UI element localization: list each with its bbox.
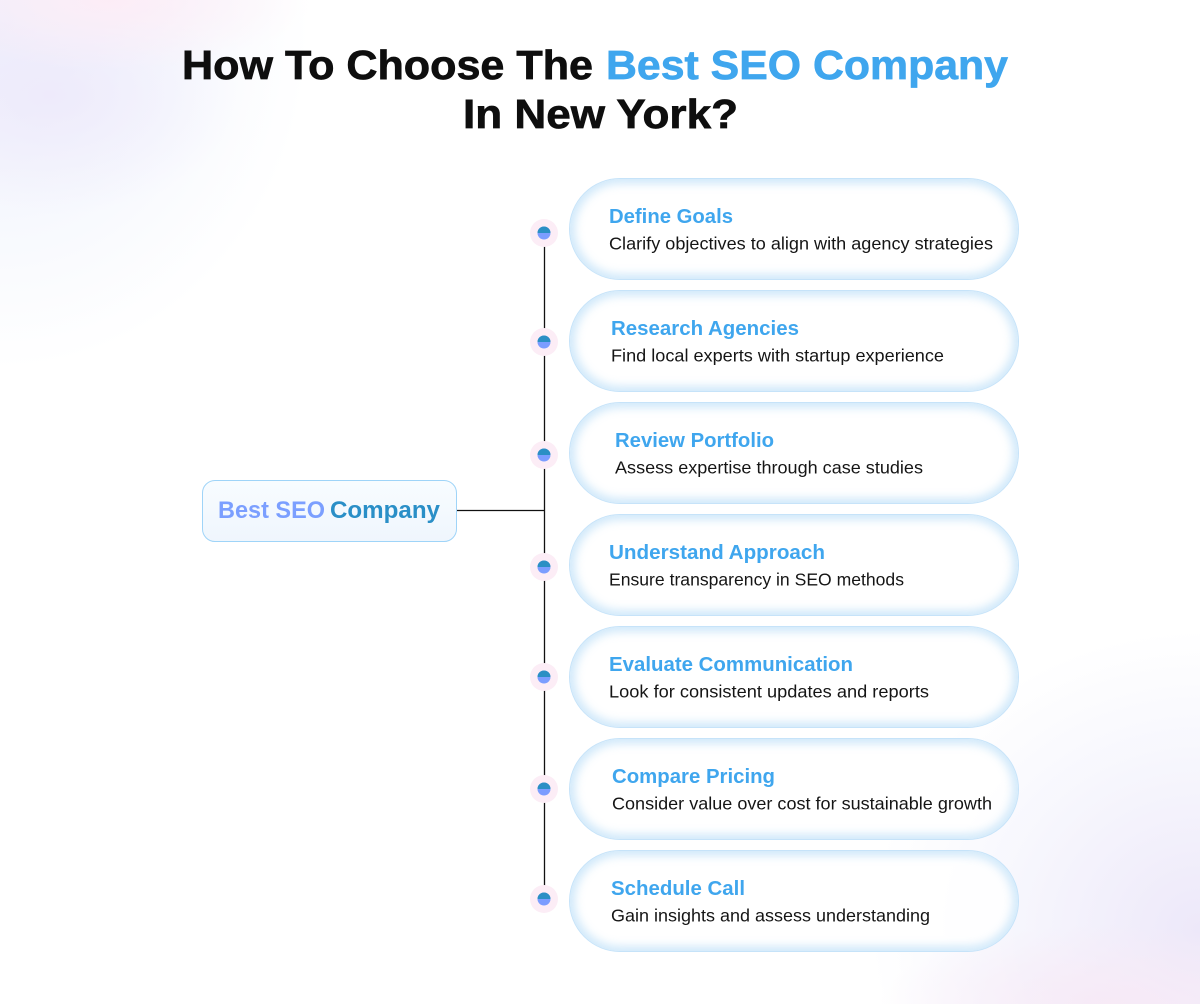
step 7 text: Schedule Call	[611, 878, 745, 900]
step 2 text	[611, 318, 944, 366]
step 1 text: Clarify objectives to align with agency strategies	[609, 234, 993, 254]
pill: evaluate communication	[569, 626, 1019, 728]
connector lines	[457, 233, 544, 899]
step 5 text: Evaluate Communication	[609, 654, 853, 676]
step 7 text: Gain insights and assess understanding	[611, 906, 930, 926]
pill: understand approach	[569, 514, 1019, 616]
step 5 text	[609, 654, 929, 702]
step 4 text: Understand Approach	[609, 542, 825, 564]
step 3 text	[615, 430, 923, 478]
pill: research agencies	[569, 290, 1019, 392]
step 4 text	[609, 542, 904, 590]
step 6 text	[612, 766, 992, 814]
pill: define goals	[569, 178, 1019, 280]
step 1 text: Define Goals	[609, 206, 733, 228]
title	[182, 42, 1008, 137]
timeline dots	[530, 219, 558, 913]
central node label	[218, 497, 441, 524]
pill: compare pricing	[569, 738, 1019, 840]
step 7 text	[611, 878, 930, 926]
title: In New York?	[463, 91, 738, 137]
step 3 text: Assess expertise through case studies	[615, 458, 923, 478]
pill: schedule call	[569, 850, 1019, 952]
step 6 text: Consider value over cost for sustainable growth	[612, 794, 992, 814]
central node label: Best SEO	[218, 497, 325, 524]
step 6 text: Compare Pricing	[612, 766, 775, 788]
step 4 text: Ensure transparency in SEO methods	[609, 570, 904, 590]
title: How To Choose The	[182, 42, 593, 88]
pill: review portfolio	[569, 402, 1019, 504]
central node label: Company	[330, 497, 441, 524]
title: Best SEO Company	[606, 42, 1008, 88]
central node: best seo company	[202, 480, 457, 542]
step 3 text: Review Portfolio	[615, 430, 774, 452]
step 2 text: Research Agencies	[611, 318, 799, 340]
step 2 text: Find local experts with startup experience	[611, 346, 944, 366]
step 5 text: Look for consistent updates and reports	[609, 682, 929, 702]
step 1 text	[609, 206, 993, 254]
